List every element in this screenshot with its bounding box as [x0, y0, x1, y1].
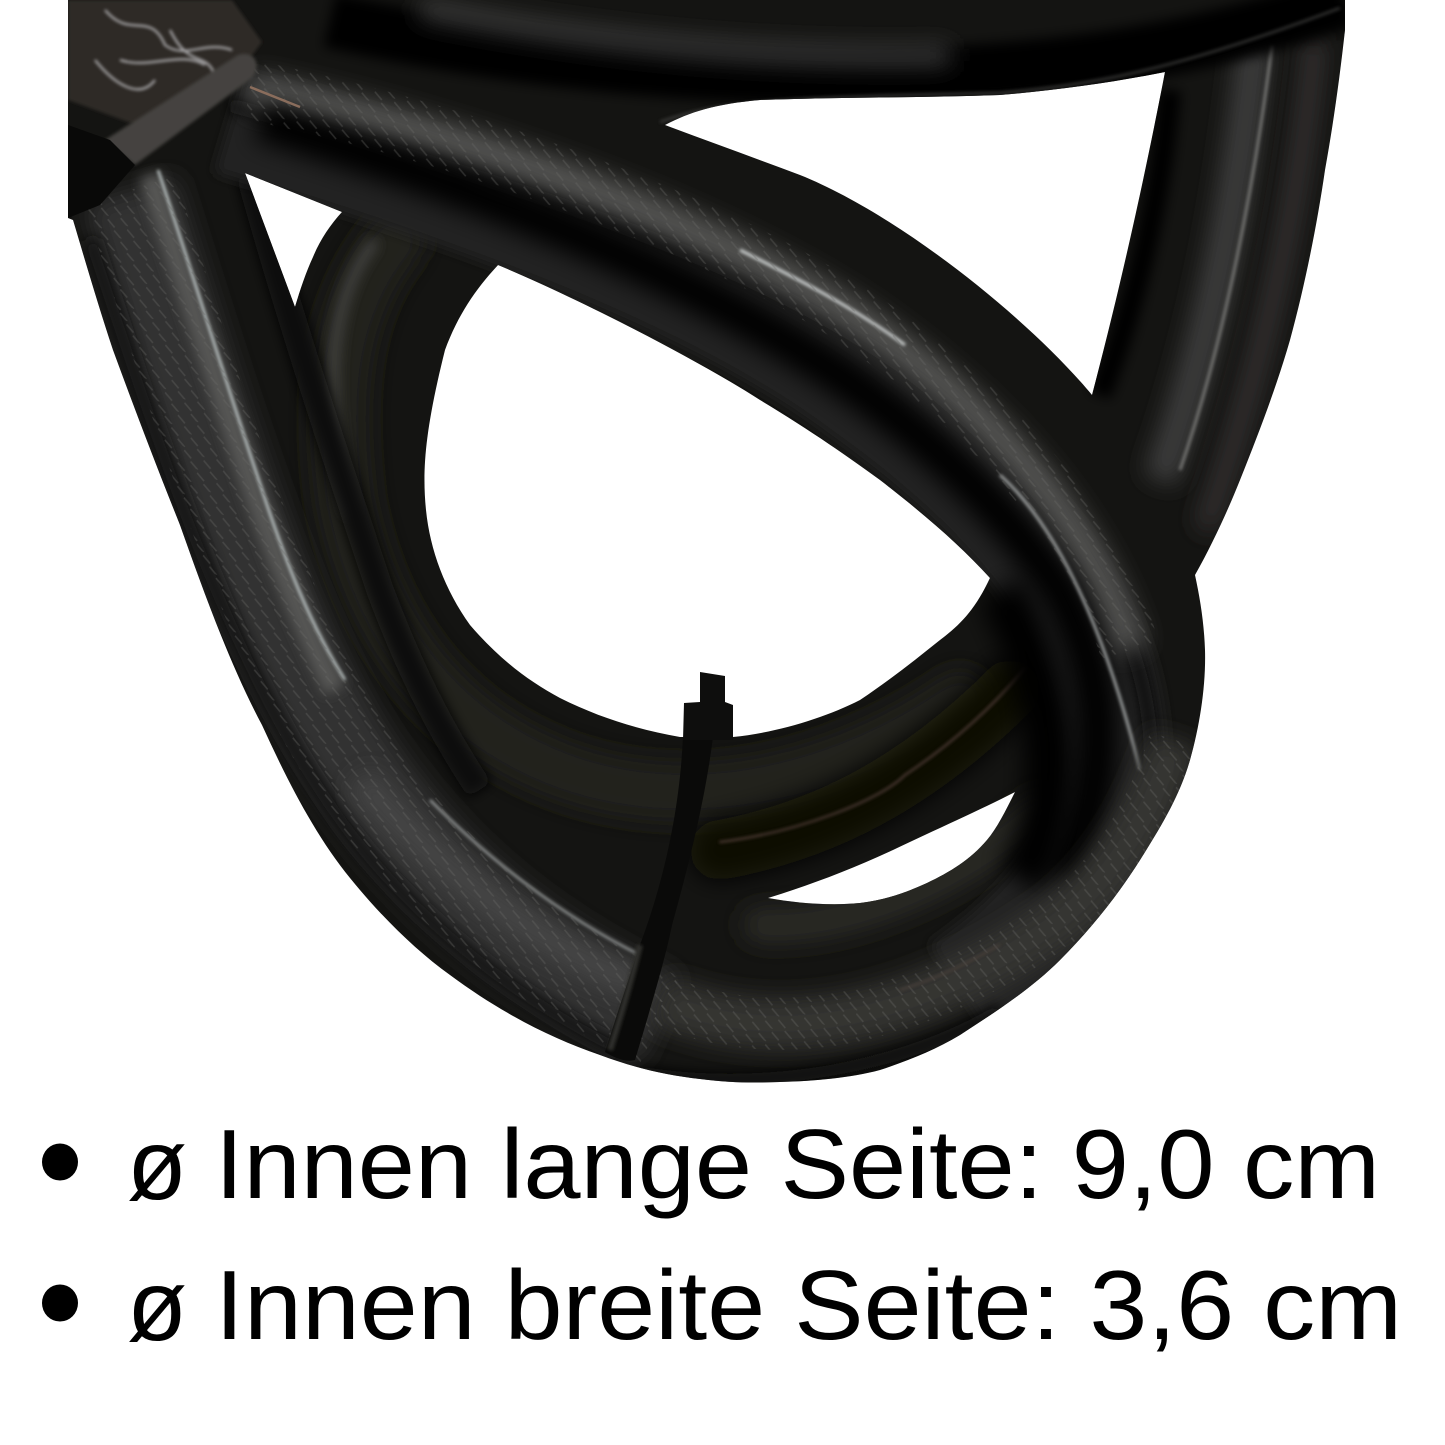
- cable tie head: [683, 672, 733, 740]
- bullet list: [42, 1109, 1402, 1362]
- front loop cable: [230, 90, 1151, 990]
- cable tie band: [605, 737, 713, 1061]
- lower woven sheath: [640, 740, 1175, 1079]
- right cable tube: [1100, 40, 1315, 530]
- cable base silhouette: [60, 0, 1360, 1090]
- bullet 2: [42, 1284, 78, 1322]
- knot at top left: [68, 0, 300, 218]
- top cable ring: [330, 0, 1345, 122]
- line 2 text: Innen breite Seite: 3,6 cm: [215, 1250, 1402, 1360]
- diameter sign 2: ø: [127, 1250, 187, 1362]
- bullet 1: [42, 1144, 78, 1180]
- diameter sign 1: ø: [127, 1109, 187, 1221]
- line 1 text: Innen lange Seite: 9,0 cm: [215, 1109, 1380, 1219]
- left cable tube: [90, 170, 660, 1050]
- cable photo: [60, 0, 1360, 1090]
- rear coil tube: [334, 240, 1040, 925]
